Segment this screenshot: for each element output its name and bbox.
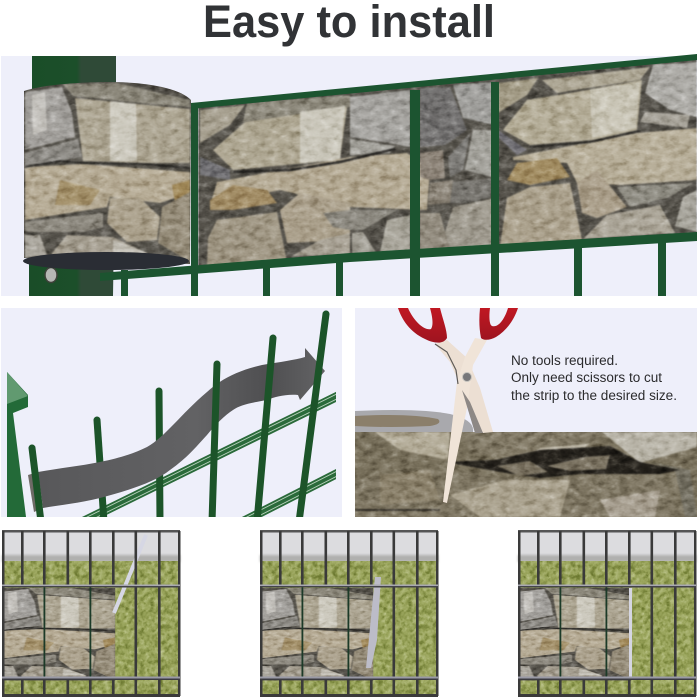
caption text [511, 353, 677, 403]
strip on fence [198, 56, 697, 268]
caption text: Only need scissors to cut [511, 370, 662, 385]
fence post corner [7, 372, 28, 517]
caption text: the strip to the desired size. [511, 388, 677, 403]
scissors [398, 308, 518, 503]
panel: threading the strip through the fence [1, 308, 346, 524]
scissors arm and left blade [443, 338, 487, 503]
ribbon tail [28, 472, 43, 512]
fence rails and uprights [100, 54, 697, 296]
scissors arm and right blade [435, 340, 493, 433]
strip roll end [355, 410, 473, 432]
lower fence uprights [121, 235, 666, 296]
caption text: No tools required. [511, 353, 618, 368]
panel: cutting with scissors [350, 308, 700, 520]
panel: fence with rolled strip [1, 54, 697, 296]
scissors pivot [462, 372, 472, 382]
back stakes [97, 391, 160, 522]
fence post [29, 56, 116, 296]
scissors edge [435, 344, 458, 384]
mesh rails [82, 392, 336, 517]
bolt [45, 268, 57, 282]
scissors handles [398, 308, 447, 343]
gray arrow ribbon [38, 348, 325, 508]
panel: step 3, strip fixed flat [516, 530, 696, 697]
front stakes [32, 314, 326, 522]
panel: step 1, strip threaded diagonally [0, 530, 180, 697]
strip roll [20, 78, 195, 270]
scissors blade shadow [462, 390, 483, 433]
panel: step 2, strip folded upward [258, 530, 438, 697]
cut strip stones [350, 428, 700, 520]
